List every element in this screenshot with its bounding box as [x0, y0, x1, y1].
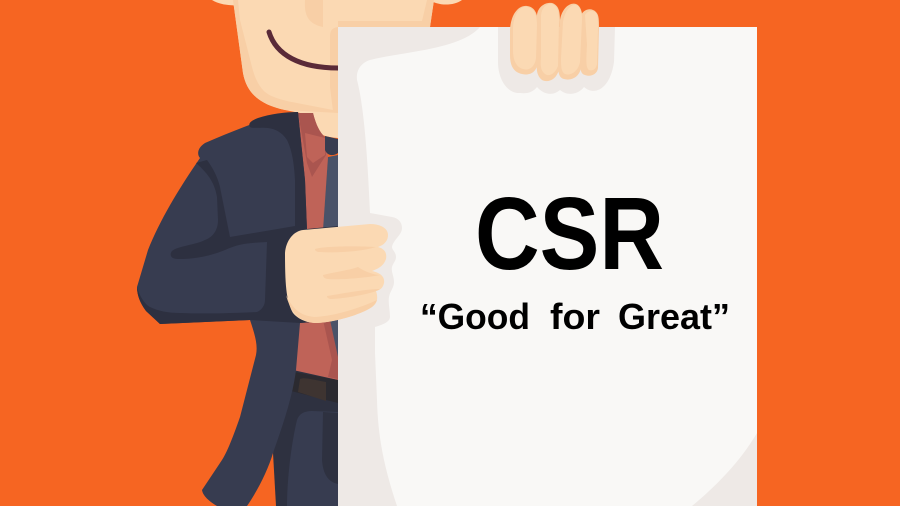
top hand gripping paper — [510, 3, 599, 81]
head and face — [212, 0, 462, 138]
belt — [291, 372, 338, 403]
finger 4 — [580, 9, 599, 76]
jacket — [137, 112, 338, 506]
subtitle: Good for Great: Great” — [618, 296, 730, 337]
title: CSR: CSR — [475, 176, 664, 291]
subtitle: Good for Great: for — [550, 296, 600, 337]
shirt — [293, 113, 338, 380]
subtitle: Good for Great: “Good — [420, 296, 530, 337]
sheet face — [357, 27, 757, 506]
finger 2 — [537, 3, 560, 81]
finger 3 — [558, 4, 583, 80]
sheet shadow layer — [338, 27, 757, 506]
subtitle: Good for Great — [420, 296, 730, 337]
smile — [269, 32, 338, 68]
inner jacket and collar — [323, 136, 338, 357]
hand on paper edge — [285, 224, 388, 323]
finger 1 — [510, 6, 538, 75]
trousers — [273, 370, 338, 506]
paper sheet — [338, 27, 757, 506]
sleeve fold shade — [137, 160, 338, 324]
businessman figure — [137, 0, 462, 506]
lapel shade — [249, 112, 307, 230]
